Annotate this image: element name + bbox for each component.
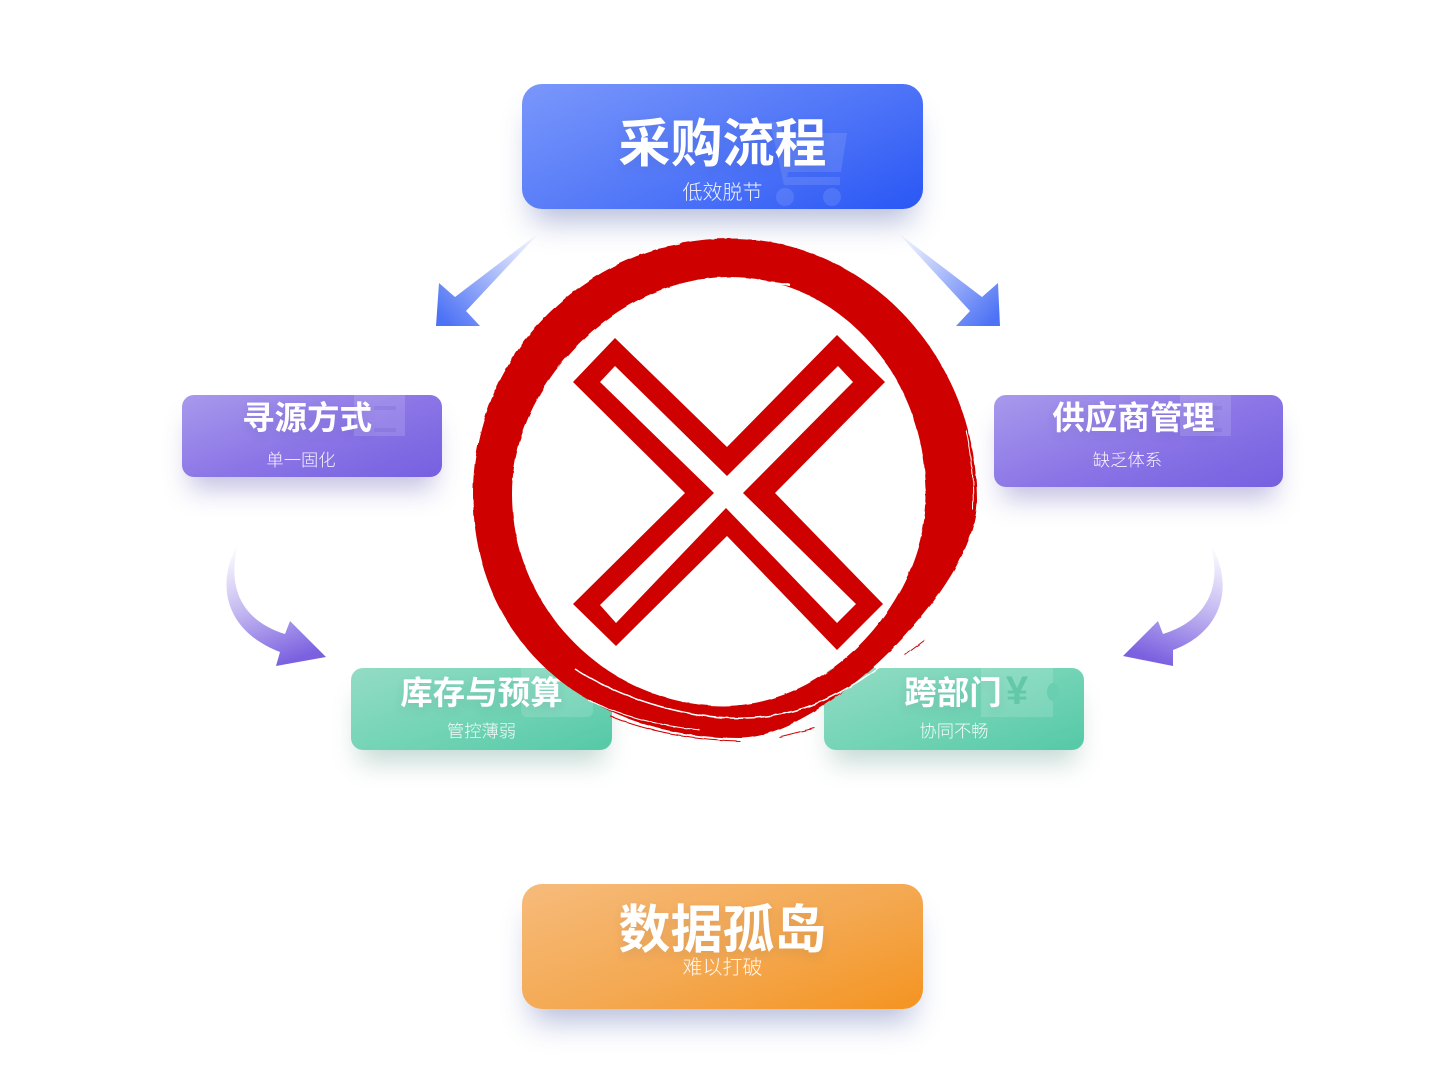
subtitle: 难以打破 (682, 957, 762, 979)
heading: 寻源方式 (242, 400, 372, 436)
subtitle: 缺乏体系 (1093, 450, 1162, 470)
panel: supplier management (988, 395, 1289, 513)
stroke wisps (818, 647, 872, 688)
icon: shopping cart watermark (770, 122, 847, 206)
heading: 采购流程 (618, 116, 826, 174)
arrow: procurement to sourcing (436, 233, 539, 326)
panel: sourcing method (176, 395, 448, 503)
heading: 跨部门 (904, 675, 1002, 711)
cross mark (573, 335, 885, 650)
icon: yuan ticket watermark: ¥ (1006, 669, 1028, 713)
icon: yuan ticket watermark (981, 668, 1053, 717)
heading: 供应商管理 (1052, 400, 1215, 436)
icon: list watermark (354, 395, 405, 436)
card background (522, 884, 923, 1009)
subtitle: 协同不畅 (919, 721, 989, 741)
card background (351, 668, 612, 750)
subtitle: 管控薄弱 (447, 721, 516, 741)
card background (182, 395, 442, 477)
arrow: supplier to cross-department (1123, 543, 1223, 666)
subtitle: 低效脱节 (682, 182, 762, 204)
subtitle: 单一固化 (266, 450, 336, 470)
icon: watermark patch (521, 668, 593, 717)
arrow: procurement to supplier (898, 233, 1000, 326)
panel: cross-department (818, 668, 1090, 776)
icon: ticket notch (1047, 683, 1059, 701)
card background (994, 395, 1283, 487)
panel: inventory and budget (346, 668, 618, 776)
panel: data silos (514, 884, 930, 1038)
arrow: sourcing to inventory (226, 542, 326, 666)
heading: 数据孤岛 (618, 902, 826, 960)
card background (522, 84, 923, 209)
heading: 库存与预算 (400, 675, 563, 711)
brush ring (473, 238, 977, 741)
icon: list watermark (1180, 395, 1231, 436)
card background (824, 668, 1084, 750)
panel: procurement process (514, 84, 930, 238)
